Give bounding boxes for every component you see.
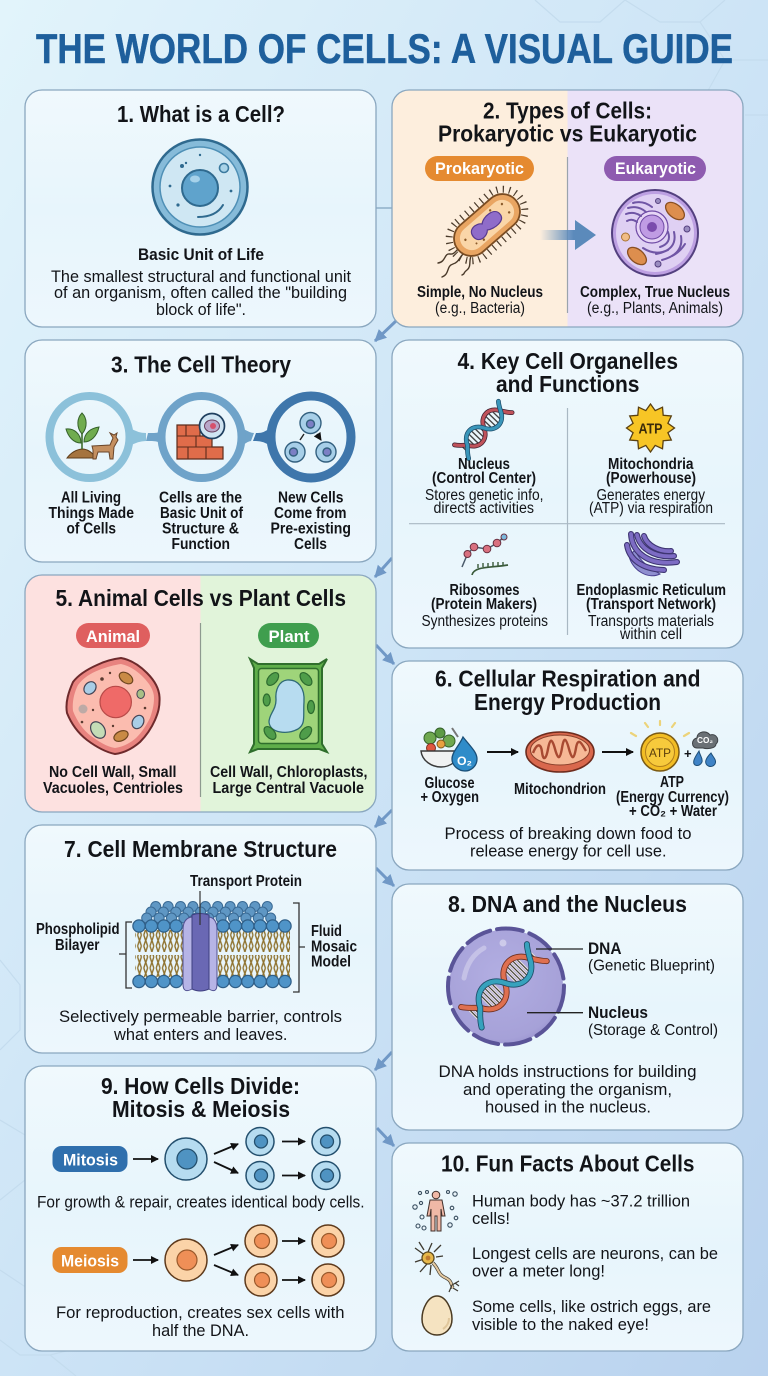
text: all living things: Things Made: [48, 505, 134, 522]
icon: nucleus with DNA: [448, 928, 583, 1044]
text: new cells: [270, 490, 351, 553]
text: glucose oxygen: + Oxygen: [420, 789, 479, 806]
heading: organelles: and Functions: [496, 371, 640, 397]
pill: eukaryotic: Eukaryotic: [615, 159, 696, 178]
label: DNA: DNA: [588, 939, 622, 958]
heading: cell theory: 3. The Cell Theory: [111, 352, 291, 378]
text: nucleus: directs activities: [434, 500, 534, 517]
heading: cell division: 9. How Cells Divide:: [101, 1073, 300, 1099]
text: mitochondria: [589, 456, 713, 517]
text: basic unit: Cells are the: [159, 490, 242, 506]
pill: meiosis: [52, 1247, 128, 1273]
text: human body fact: cells!: [472, 1209, 510, 1228]
icon: eukaryotic cell: [612, 190, 698, 276]
pill: eukaryotic: [604, 156, 706, 181]
text: ribosomes: [422, 582, 548, 630]
label: phospholipid bilayer: Phospholipid: [36, 921, 120, 938]
label: nucleus: [588, 1003, 718, 1039]
label: fluid mosaic model: [311, 923, 357, 970]
text: all living things: [48, 490, 134, 538]
text: ribosomes: Synthesizes proteins: [422, 613, 548, 630]
text: nucleus: Stores genetic info,: [425, 487, 544, 504]
text: basic unit: [159, 490, 244, 553]
icon: ATP coin and products: ATP: [649, 746, 671, 760]
text: egg fact: Some cells, like ostrich eggs, are: [472, 1297, 711, 1316]
icon: DNA helix: [454, 399, 513, 459]
pill: mitosis: Mitosis: [63, 1150, 118, 1170]
panel: cell division: [25, 1066, 376, 1351]
icon: ATP burst: [626, 404, 674, 452]
text: endoplasmic reticulum: Endoplasmic Reticulum: [576, 582, 726, 599]
text: ribosomes: Ribosomes: [450, 582, 520, 599]
label: DNA: (Genetic Blueprint): [588, 958, 715, 974]
heading: organelles: 4. Key Cell Organelles: [458, 348, 678, 374]
text: meiosis purpose: [56, 1303, 344, 1340]
text: egg fact: visible to the naked eye!: [472, 1315, 649, 1334]
label: phospholipid bilayer: Bilayer: [55, 937, 100, 954]
text: endoplasmic reticulum: (Transport Network): [586, 596, 716, 613]
text: prokaryotic caption: Simple, No Nucleus: [417, 284, 543, 301]
text: animal traits: [43, 764, 183, 797]
icon: animal cell: [66, 658, 160, 754]
text: nucleus: [425, 456, 544, 517]
text: mitochondria: Generates energy: [596, 487, 705, 504]
panel: what is a cell: [25, 90, 376, 327]
text: new cells: Come from: [274, 505, 346, 522]
description: DNA: and operating the organism,: [463, 1080, 672, 1099]
label: fluid mosaic model: Fluid: [311, 923, 342, 940]
icon: linked rings: [50, 396, 351, 478]
icon: plant and animal: [66, 413, 118, 459]
icon: ATP coin and products: [631, 721, 718, 771]
text: glucose oxygen: [420, 775, 479, 806]
description: respiration: release energy for cell use.: [470, 842, 666, 860]
text: new cells: Cells: [294, 536, 327, 553]
text: egg fact: [472, 1297, 711, 1334]
heading: cellular respiration: 6. Cellular Respiration and: [435, 666, 700, 692]
text: glucose oxygen: Glucose: [424, 775, 475, 792]
icon: bacterium: [438, 180, 534, 277]
icon: ATP burst: ATP: [638, 420, 662, 438]
text: neuron fact: Longest cells are neurons, can be: [472, 1244, 718, 1263]
pill: animal: [76, 623, 150, 648]
heading: cell division: Mitosis & Meiosis: [112, 1096, 290, 1122]
text: animal traits: No Cell Wall, Small: [49, 764, 176, 781]
text: new cells: Pre-existing: [270, 520, 351, 538]
label: phospholipid bilayer: [36, 921, 120, 954]
description: cell: [51, 267, 351, 319]
panel: DNA and nucleus: [392, 884, 743, 1130]
icon: egg: [422, 1296, 452, 1335]
description: DNA: DNA holds instructions for building: [438, 1062, 696, 1081]
text: endoplasmic reticulum: within cell: [619, 626, 682, 643]
text: nucleus: Nucleus: [458, 456, 510, 473]
text: meiosis purpose: half the DNA.: [152, 1321, 249, 1340]
text: mitosis purpose: For growth & repair, creates identical body cells.: [37, 1192, 364, 1212]
icon: human body: [413, 1190, 458, 1231]
text: endoplasmic reticulum: Transports materials: [588, 613, 714, 630]
text: mitochondria: (Powerhouse): [606, 470, 696, 487]
text: plant traits: [210, 764, 368, 797]
text: human body fact: Human body has ~37.2 trillion: [472, 1192, 690, 1210]
text: neuron fact: over a meter long!: [472, 1262, 605, 1280]
connector arrows between panels: [375, 208, 397, 1146]
label: transport protein: Transport Protein: [190, 873, 302, 890]
text: basic unit of life: Basic Unit of Life: [138, 245, 264, 264]
panel: fun facts: [392, 1143, 743, 1351]
description: cell: block of life".: [156, 300, 246, 319]
pill: animal: Animal: [86, 627, 140, 646]
icon: mitochondrion: [526, 732, 594, 772]
icon: ribosomes: [462, 534, 508, 575]
panel: cellular respiration: [392, 661, 743, 870]
description: membrane: [59, 1007, 342, 1044]
diagram: phospholipid bilayer: [119, 891, 305, 992]
icon: endoplasmic reticulum: [627, 534, 677, 576]
panel: animal vs plant: [25, 575, 376, 812]
text: eukaryotic caption: (e.g., Plants, Animals): [587, 300, 723, 317]
arrow: prokaryotic to eukaryotic: [540, 220, 596, 250]
text: ATP products: (Energy Currency): [616, 789, 729, 806]
text: nucleus: (Control Center): [432, 470, 536, 487]
heading: fun facts: 10. Fun Facts About Cells: [441, 1150, 694, 1176]
text: all living things: All Living: [61, 490, 121, 506]
text: plant traits: Large Central Vacuole: [212, 780, 364, 797]
pill: prokaryotic: Prokaryotic: [435, 159, 524, 178]
text: mitochondria: Mitochondria: [608, 456, 694, 473]
pill: meiosis: Meiosis: [61, 1252, 119, 1270]
text: animal traits: Vacuoles, Centrioles: [43, 780, 183, 797]
text: eukaryotic caption: [580, 284, 730, 317]
label: fluid mosaic model: Mosaic: [311, 938, 357, 956]
text: ATP products: ATP: [660, 774, 684, 791]
text: prokaryotic caption: (e.g., Bacteria): [435, 300, 525, 317]
text: endoplasmic reticulum: [576, 582, 726, 643]
panel: organelles: [392, 340, 743, 648]
pill: plant: Plant: [268, 627, 310, 646]
text: eukaryotic caption: Complex, True Nucleus: [580, 284, 730, 301]
panel: cell theory: [25, 340, 376, 562]
text: mitochondrion: Mitochondrion: [514, 781, 606, 798]
text: basic unit: Structure &: [162, 520, 239, 538]
icon: dividing cells: [285, 412, 336, 462]
description: respiration: [444, 824, 692, 860]
heading: organelles: [458, 348, 678, 397]
description: membrane: Selectively permeable barrier, controls: [59, 1007, 342, 1026]
description: membrane: what enters and leaves.: [113, 1025, 288, 1044]
panel: cell membrane: [25, 825, 376, 1053]
icon: bricks and cell: [177, 414, 224, 459]
diagram: mitosis: [133, 1128, 340, 1190]
text: meiosis purpose: For reproduction, creates sex cells with: [56, 1303, 344, 1322]
icon: cell: [152, 140, 248, 234]
pill: plant: [258, 623, 319, 648]
text: all living things: of Cells: [66, 520, 116, 538]
text: plant traits: Cell Wall, Chloroplasts,: [210, 764, 368, 781]
text: basic unit: Basic Unit of: [160, 505, 244, 522]
icon: salad and oxygen: [421, 728, 477, 771]
icon: neuron: [415, 1242, 459, 1292]
text: ATP products: [616, 774, 729, 820]
heading: types of cells: Prokaryotic vs Eukaryotic: [438, 120, 697, 146]
arrow: to mitochondrion: [487, 751, 518, 753]
text: ribosomes: (Protein Makers): [431, 596, 537, 613]
text: neuron fact: [472, 1244, 718, 1280]
description: DNA: [438, 1062, 696, 1116]
text: mitochondria: (ATP) via respiration: [589, 500, 713, 517]
diagram: meiosis: [133, 1225, 344, 1296]
heading: what is a cell: 1. What is a Cell?: [117, 101, 285, 127]
label: nucleus: (Storage & Control): [588, 1022, 718, 1039]
text: basic unit: Function: [172, 536, 230, 553]
description: respiration: Process of breaking down food to: [444, 824, 692, 843]
heading: cellular respiration: Energy Production: [474, 689, 661, 715]
text: human body fact: [472, 1192, 690, 1228]
label: fluid mosaic model: Model: [311, 954, 351, 970]
label: nucleus: Nucleus: [588, 1003, 648, 1022]
label: DNA: [588, 939, 715, 974]
heading: cell division: [101, 1073, 300, 1122]
text: prokaryotic caption: [417, 284, 543, 317]
text: ATP products: + CO₂ + Water: [629, 803, 717, 820]
panel: types of cells: [392, 90, 743, 327]
pill: mitosis: [52, 1146, 128, 1172]
heading: animal vs plant: 5. Animal Cells vs Plant Cells: [56, 585, 346, 611]
description: DNA: housed in the nucleus.: [485, 1098, 651, 1116]
heading: types of cells: 2. Types of Cells:: [483, 98, 652, 124]
icon: salad and oxygen: O₂: [457, 754, 472, 768]
heading: DNA and nucleus: 8. DNA and the Nucleus: [448, 891, 687, 917]
icon: plant cell: [250, 659, 327, 752]
text: new cells: New Cells: [278, 490, 344, 506]
arrow: to ATP: [602, 751, 633, 753]
icon: ATP coin and products: CO₂: [697, 736, 713, 745]
description: cell: of an organism, often called the "building: [54, 283, 347, 302]
heading: cellular respiration: [435, 666, 700, 715]
pill: prokaryotic: [425, 156, 534, 181]
icon: ATP coin and products: +: [684, 746, 692, 761]
heading: types of cells: [438, 98, 697, 146]
description: cell: The smallest structural and functional unit: [51, 267, 351, 286]
heading: cell membrane: 7. Cell Membrane Structure: [64, 836, 337, 862]
